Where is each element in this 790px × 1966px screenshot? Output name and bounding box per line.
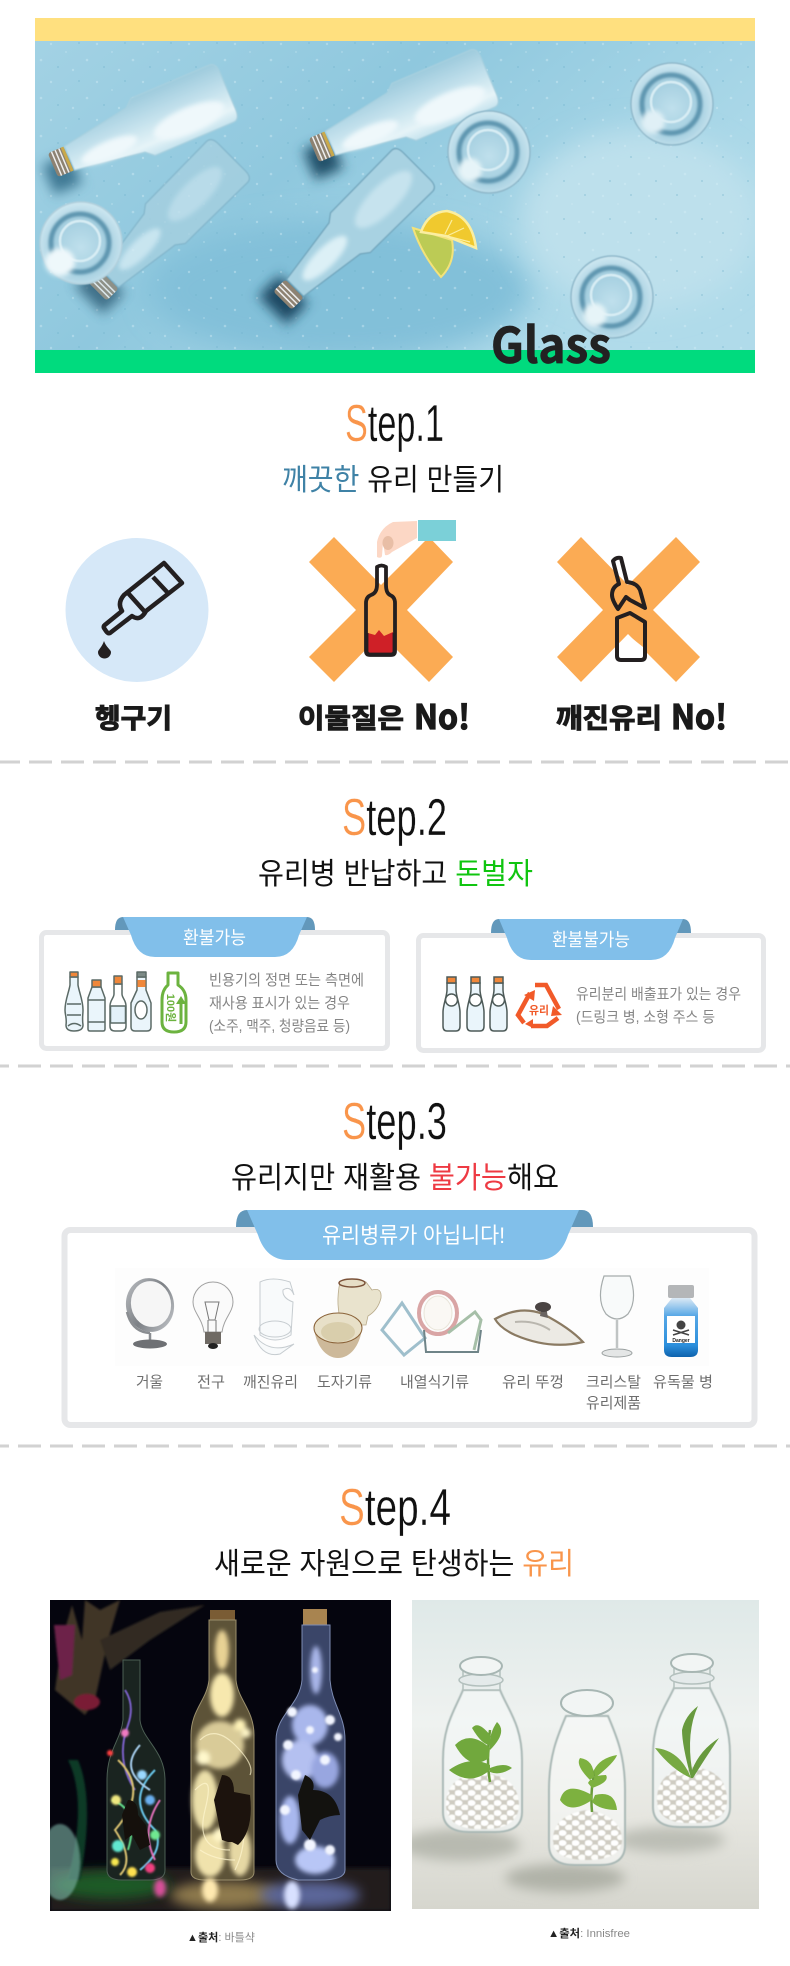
label: no broken glass: No! [671,690,727,739]
item: broken glass [254,1279,294,1355]
heading: Step.3: Step.3 [342,1093,447,1151]
icon: reusable bottles [65,972,151,1031]
blue light bottle [276,1609,345,1880]
icon: glass recycling mark: 유리 [529,1004,549,1017]
icon: glass recycling mark [518,985,562,1028]
text: refundable conditions: 재사용 표시가 있는 경우 [209,995,350,1012]
ribbon: refundable [115,917,315,957]
label: rinsing: 헹구기 [95,704,172,734]
icon: no broken glass [557,537,700,682]
section: step 4 [40,1479,759,1944]
item: mirror [122,1274,178,1348]
label: crystal glass products: 유리제품 [586,1395,641,1412]
item: poison bottle: Danger [672,1338,690,1344]
section: step 3 [64,1093,754,1425]
rainbow bottle [107,1660,165,1880]
green bottom band [35,350,755,373]
label: bulb: 전구 [197,1374,225,1391]
label: no broken glass: 깨진유리 [556,704,662,734]
label: no foreign matter: 이물질은 [298,704,404,734]
text: not refundable conditions: (드링크 병, 소형 주스 등 [576,1009,715,1026]
label: no broken glass [556,690,727,739]
item: heat-resistant containers [382,1292,481,1355]
label: crystal glass products: 크리스탈 [586,1374,641,1391]
subtitle: 깨끗한 유리 만들기 [282,464,504,497]
panel: refundable [42,917,388,1048]
subtitle: 새로운 자원으로 탄생하는 유리 [214,1548,574,1581]
caption: right photo source: ▲출처: Innisfree [548,1927,630,1940]
label: glass lid: 유리 뚜껑 [502,1374,564,1391]
item: glass lid [495,1302,583,1345]
ribbon: refundable: 환불가능 [183,928,246,948]
caption: left photo source: ▲출처: 바틀샥 [187,1931,255,1944]
subtitle: 유리지만 재활용 불가능해요 [231,1162,559,1195]
ribbon: not refundable [491,919,691,960]
ribbon: not refundable: 환불불가능 [552,930,630,950]
label: ceramics: 도자기류 [317,1374,372,1391]
icon: no foreign matter [309,520,456,682]
bottle with plant A [443,1657,522,1832]
text: refundable conditions [209,972,364,1035]
label: no foreign matter [298,690,470,739]
label: heat-resistant containers: 내열식기류 [400,1374,469,1391]
icon: rinsing bottle [66,538,208,682]
text: not refundable conditions: 유리분리 배출표가 있는 경우 [576,986,741,1003]
heading: Step.4: Step.4 [339,1479,451,1537]
text: refundable conditions: (소주, 맥주, 청량음료 등) [209,1018,350,1035]
item: light bulb [193,1282,233,1349]
label: mirror: 거울 [136,1374,163,1391]
bottle with plant B [549,1690,625,1865]
section: step 1 [66,395,727,739]
section: step 2 [42,789,764,1050]
heading: Step.2: Step.2 [342,789,447,847]
bottle with plant C [653,1654,730,1827]
ribbon: not glass bottles: 유리병류가 아닙니다! [322,1223,505,1248]
label: crystal glass products [586,1374,641,1412]
hero banner: glass bottles photo [32,18,760,378]
label: broken glass: 깨진유리 [243,1374,298,1391]
label: Glass: Glass [491,307,611,378]
icon: drink bottles [443,977,507,1031]
heading: Step.1: Step.1 [345,395,444,453]
photo: bottle lights [40,1600,391,1911]
item: wine glass [600,1276,634,1357]
warm light bottle [191,1610,254,1880]
panel: not glass bottles [64,1210,754,1425]
icon: 100 won bottle [162,973,186,1032]
text: refundable conditions: 빈용기의 정면 또는 측면에 [209,972,364,989]
panel: not refundable [418,919,764,1050]
label: no foreign matter: No! [414,690,470,739]
item: ceramics [314,1279,381,1358]
icon: 100 won bottle: 100원 [164,994,178,1022]
item: poison bottle [664,1285,698,1357]
ribbon: not glass bottles [236,1210,593,1260]
subtitle: 유리병 반납하고 돈벌자 [258,858,533,891]
photo of water bottles and glasses [32,41,760,360]
text: not refundable conditions [576,986,741,1026]
yellow top band [35,18,755,41]
photo: plants in glass bottles [400,1600,759,1909]
label: poison bottle: 유독물 병 [653,1374,713,1391]
